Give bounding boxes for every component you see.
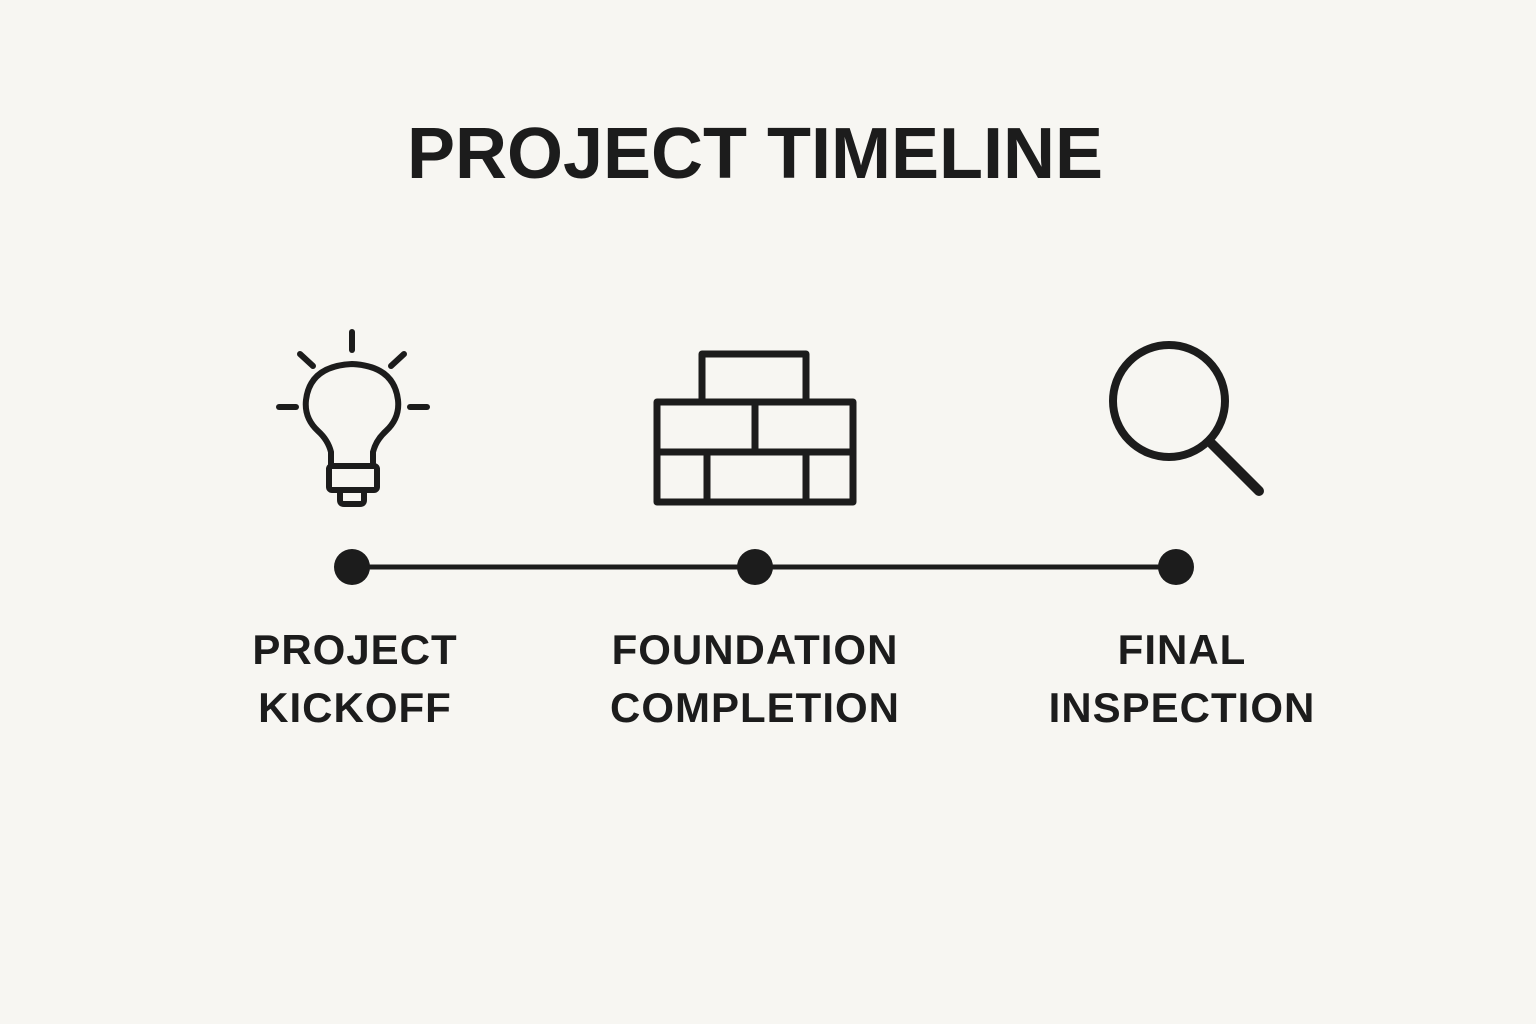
- milestone dots: [334, 549, 1194, 585]
- icon: light bulb: [279, 332, 427, 504]
- label: foundation completion: FOUNDATION: [612, 626, 898, 673]
- label: final inspection: INSPECTION: [1049, 684, 1315, 731]
- label: foundation completion: [610, 626, 900, 731]
- label: project kickoff: KICKOFF: [258, 684, 452, 731]
- icon: magnifying glass: [1113, 345, 1259, 491]
- icon: bricks: [657, 354, 853, 502]
- timeline line: [352, 564, 1176, 570]
- label: project kickoff: PROJECT: [252, 626, 458, 673]
- label: foundation completion: COMPLETION: [610, 684, 900, 731]
- label: project kickoff: [252, 626, 458, 731]
- label: final inspection: [1049, 626, 1315, 731]
- title: PROJECT TIMELINE: [407, 114, 1103, 194]
- label: final inspection: FINAL: [1118, 626, 1246, 673]
